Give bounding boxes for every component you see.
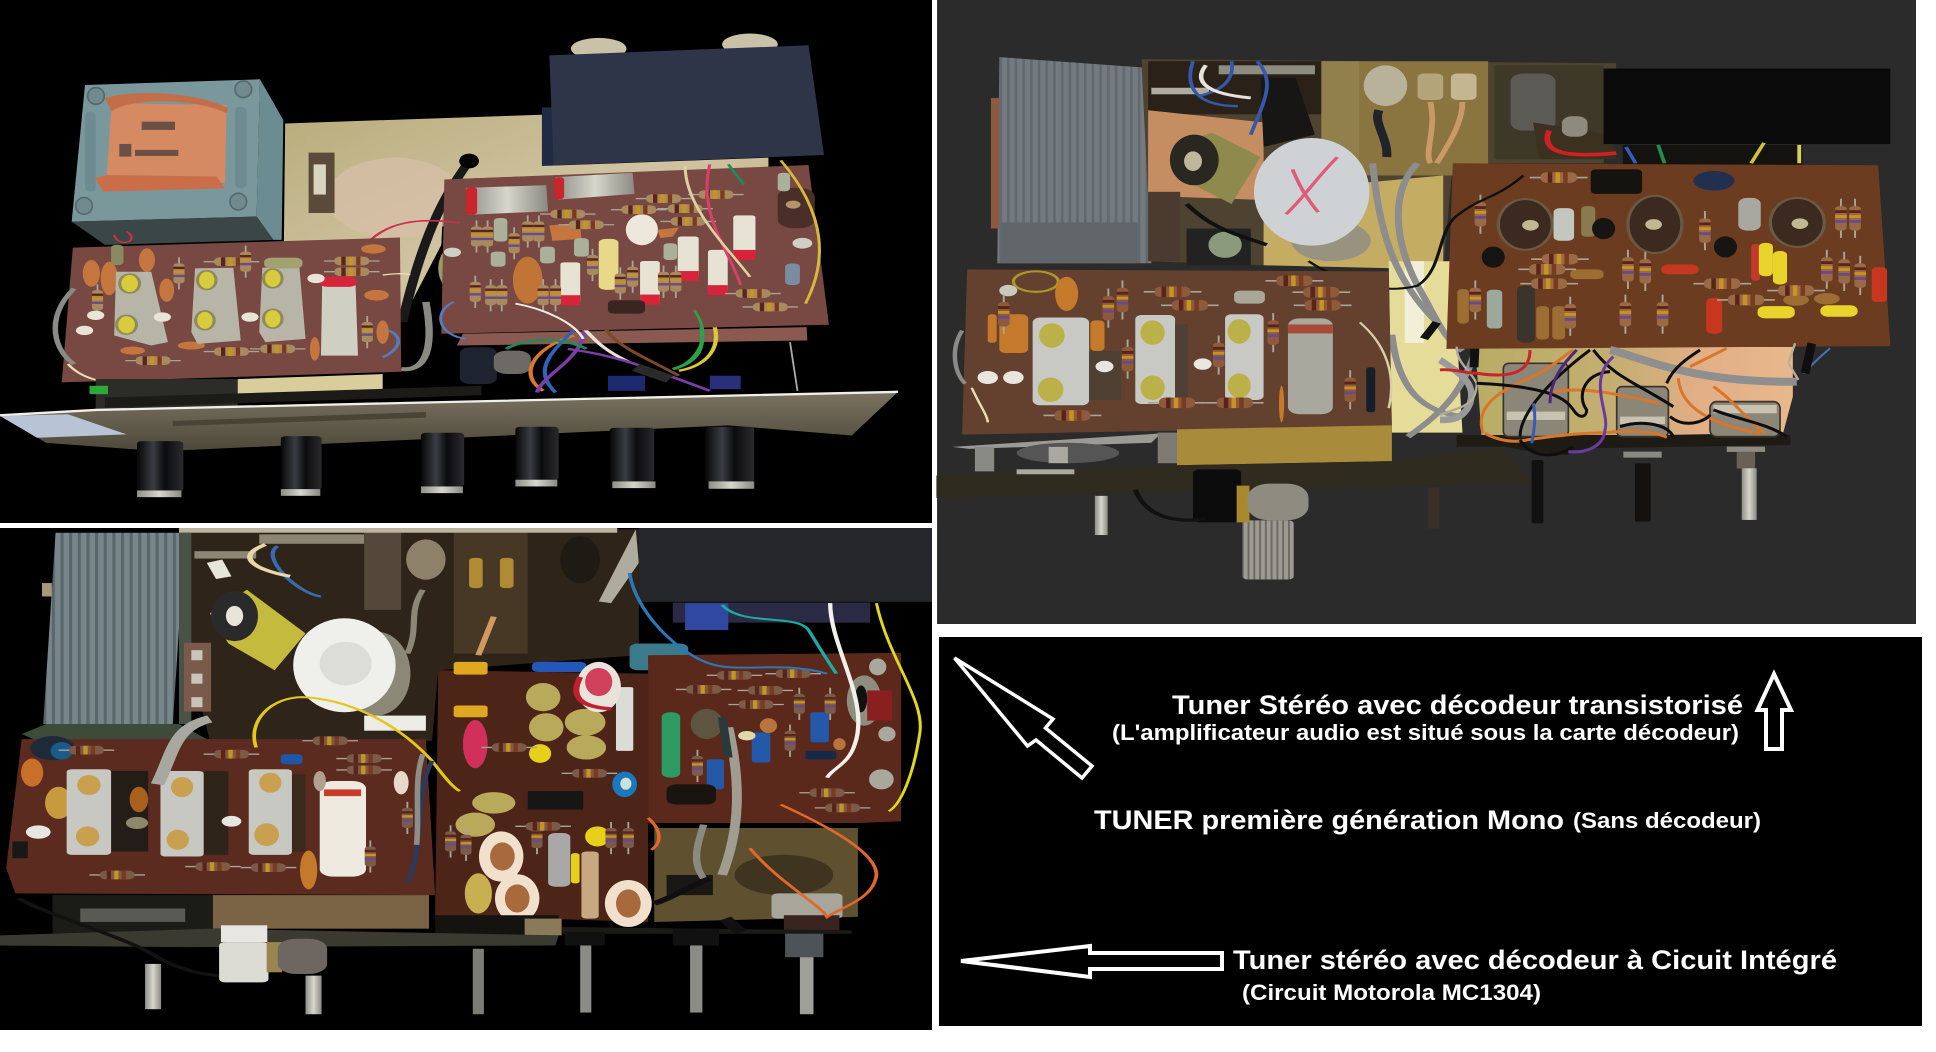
caption: transistor decoder heading: Tuner Stéréo avec décodeur transistorisé [1172, 690, 1743, 720]
gray cable bundle [1373, 163, 1475, 437]
front panel [0, 379, 898, 451]
colored wires [19, 573, 920, 976]
panel: captions [939, 637, 1922, 1026]
dial drive and front plate [936, 433, 1533, 498]
lower board behind [457, 327, 807, 346]
caption: mono tuner note: (Sans décodeur) [1573, 808, 1761, 833]
central decoder board [435, 662, 652, 927]
flat braid [157, 719, 210, 784]
shafts [1095, 488, 1439, 535]
left IF board [6, 736, 435, 895]
caption: transistor decoder note: (L'amplificateur audio est situé sous la carte décodeur) [1112, 720, 1739, 745]
olive capacitor [1148, 133, 1267, 265]
potentiometers, wiring and shafts [1440, 343, 1830, 523]
right audio board [648, 653, 901, 823]
right amplifier board [441, 160, 829, 369]
meter box with binding posts [542, 34, 824, 166]
left IF board [55, 231, 410, 384]
transformer [991, 57, 1267, 263]
right decoder board [1308, 163, 1890, 411]
red wire [361, 221, 460, 252]
transformer [72, 79, 283, 245]
panel: stereo tuner with integrated circuit decoder photo [0, 528, 932, 1030]
chassis plate [284, 115, 768, 322]
yellow capacitor [184, 590, 306, 712]
transformer [22, 533, 210, 741]
silver can with pink cross [1254, 138, 1371, 261]
lower chassis strip [0, 895, 852, 947]
bright chassis under boards [1389, 261, 1793, 439]
wires under meter [630, 603, 870, 670]
arrow: left toward integrated circuit tuner [961, 946, 1222, 977]
white can [293, 618, 426, 731]
wires behind meter [1623, 143, 1802, 165]
lamp and wiring loom [401, 299, 797, 393]
lower right panel [654, 828, 858, 930]
rear chassis [179, 528, 639, 741]
panel: first generation mono tuner photo [0, 0, 932, 523]
dial lamp and tuning knob [1135, 469, 1308, 580]
control knobs [137, 427, 754, 497]
caption: mono tuner heading: TUNER première génération Mono [1094, 805, 1564, 835]
arrow: toward top left mono tuner [954, 658, 1092, 778]
panel: stereo tuner with transistor decoder photo [936, 0, 1916, 624]
meter box [1604, 69, 1890, 144]
shafts and dial lamp [145, 925, 823, 1014]
black meter box [639, 528, 932, 602]
brass plate [1177, 425, 1392, 465]
caption: integrated circuit heading: Tuner stéréo avec décodeur à Cicuit Intégré [1233, 945, 1837, 975]
left IF board [955, 269, 1392, 435]
connectors on the rear [1364, 65, 1477, 163]
arrow: up toward transistor decoder tuner [1758, 674, 1791, 749]
yellow card under left board [238, 374, 383, 395]
chassis rear area [1142, 59, 1616, 269]
caption: integrated circuit note: (Circuit Motorola MC1304) [1242, 980, 1541, 1005]
